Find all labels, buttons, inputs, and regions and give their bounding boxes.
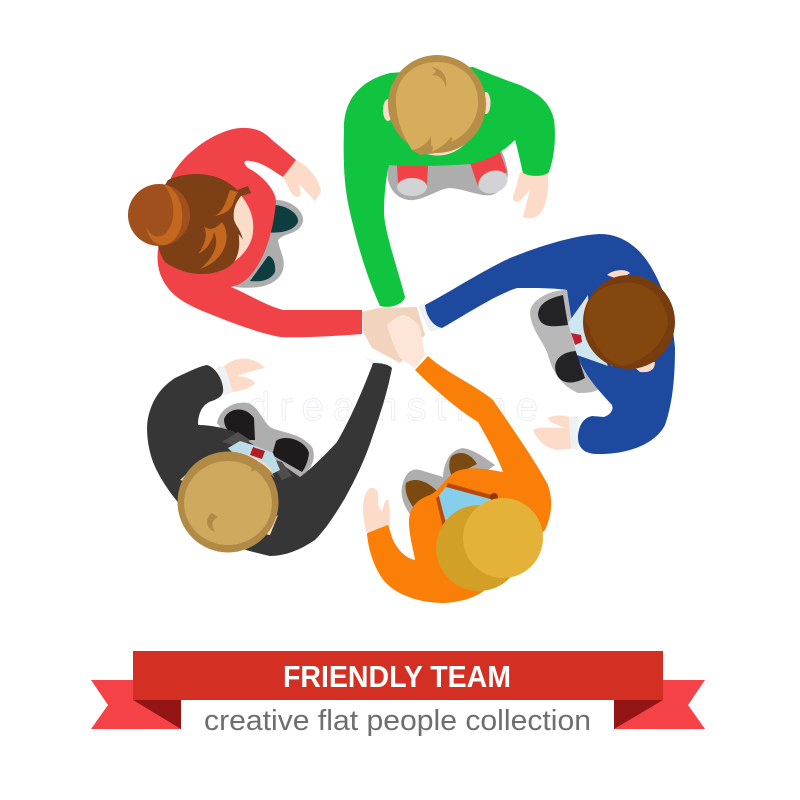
ears and neck — [383, 99, 393, 121]
ribbon folds — [133, 700, 181, 729]
hair — [436, 505, 522, 591]
shoes — [530, 290, 600, 393]
clasped hands — [362, 307, 425, 368]
cuff — [366, 358, 392, 371]
banner subtitle: creative flat people collection — [204, 705, 591, 737]
right hand — [513, 172, 548, 218]
ribbon banner — [91, 651, 705, 737]
shoes and legs — [388, 150, 508, 200]
hand — [533, 415, 578, 450]
shirt and tie — [228, 441, 280, 480]
face — [225, 192, 253, 262]
hair — [178, 452, 278, 552]
neck — [215, 452, 272, 490]
hand — [363, 488, 390, 532]
hair and bun — [156, 174, 251, 274]
shoes — [235, 200, 303, 288]
banner title: FRIENDLY TEAM — [283, 659, 511, 694]
left ribbon tail — [91, 680, 181, 729]
watermark: dreamstime — [248, 385, 538, 429]
ears and face — [607, 270, 630, 280]
shoes — [402, 448, 495, 520]
person: blue suit — [418, 234, 675, 454]
red body and arm — [157, 128, 362, 337]
ribbon main band — [133, 651, 663, 700]
green body and arm — [344, 67, 555, 307]
subtitle backing — [181, 700, 614, 736]
shoes — [217, 403, 314, 477]
right ribbon tail — [614, 680, 705, 729]
shirt and tie — [568, 295, 608, 366]
shirt and collar — [438, 485, 495, 540]
person: red sweater — [128, 128, 362, 337]
lapels — [222, 432, 292, 480]
blue body and arm — [425, 234, 675, 454]
black body and arm — [147, 363, 392, 556]
neck — [450, 500, 496, 548]
hand — [283, 160, 321, 201]
person: dark suit — [147, 358, 392, 556]
hair — [388, 55, 486, 153]
person: orange jacket — [363, 356, 551, 603]
person: green sweater — [344, 55, 555, 307]
orange body and arms — [367, 356, 551, 603]
hair — [583, 275, 675, 369]
hand — [222, 359, 265, 394]
cuff — [418, 303, 442, 332]
